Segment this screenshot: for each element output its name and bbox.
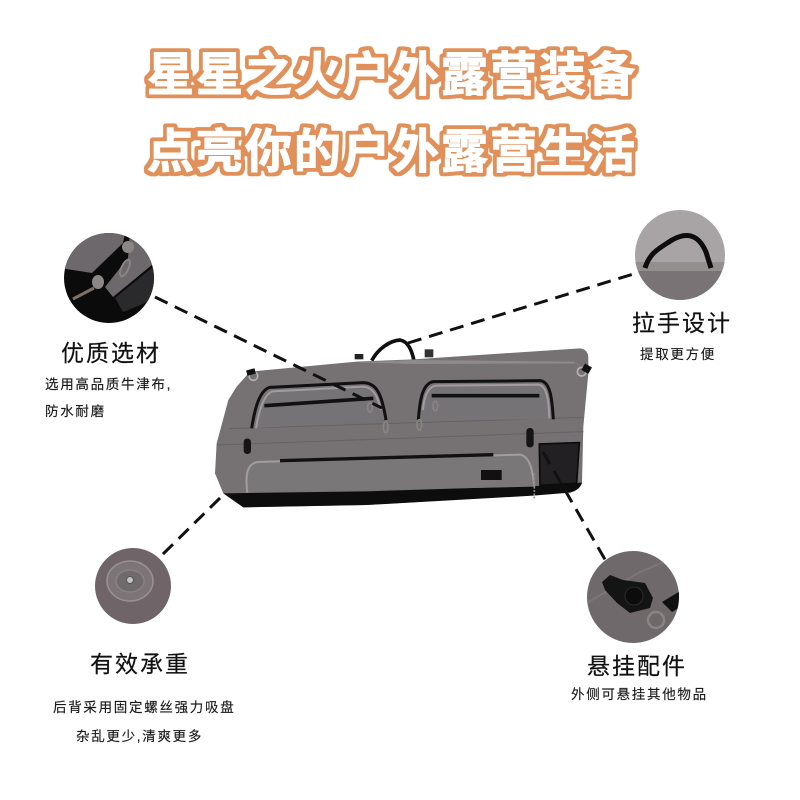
- title: 点亮你的户外露营生活: [147, 125, 637, 178]
- icon: zipper detail circle: [64, 233, 154, 323]
- bag body: [215, 348, 588, 507]
- dashed arrow: load bearing: [160, 498, 220, 557]
- clip left: [244, 439, 251, 454]
- title: [147, 48, 637, 178]
- title: 星星之火户外露营装备: [147, 48, 637, 101]
- text: hanging accessory description: 外侧可悬挂其他物品: [571, 687, 708, 702]
- heading: hanging accessory: 悬挂配件: [587, 653, 687, 679]
- left pocket: [252, 383, 386, 428]
- text: quality material description: [45, 376, 172, 419]
- icon: suction cup detail circle: [95, 548, 171, 624]
- text: quality material description: 防水耐磨: [45, 404, 106, 419]
- text: load bearing description: [53, 699, 235, 744]
- strap rings and tabs: [246, 349, 592, 380]
- dashed arrow: material: [155, 297, 382, 408]
- lower pocket: [246, 454, 534, 493]
- text: load bearing description: 后背采用固定螺丝强力吸盘: [53, 699, 235, 715]
- dashed arrow: handle: [408, 272, 640, 343]
- heading: handle design: 拉手设计: [632, 310, 732, 336]
- text: load bearing description: 杂乱更少,清爽更多: [76, 728, 203, 744]
- clip right: [526, 428, 534, 447]
- text: quality material description: 选用高品质牛津布,: [45, 376, 172, 392]
- icon: handle detail circle: [635, 210, 725, 300]
- right pocket: [418, 381, 553, 420]
- icon: hanging clip detail circle: [585, 550, 682, 646]
- bag handle: [372, 340, 414, 361]
- bag product photo: [215, 340, 592, 507]
- heading: quality material: 优质选材: [61, 340, 161, 366]
- top flap: [357, 360, 588, 373]
- dashed arrow: hanging accessory: [543, 452, 607, 563]
- zipper pulls: [368, 401, 534, 498]
- heading: load bearing: 有效承重: [90, 651, 190, 677]
- label patch: [481, 470, 502, 480]
- mesh side pocket: [539, 443, 579, 485]
- bag base: [223, 483, 582, 507]
- fold seams: [217, 417, 583, 445]
- text: handle description: 提取更方便: [640, 347, 716, 362]
